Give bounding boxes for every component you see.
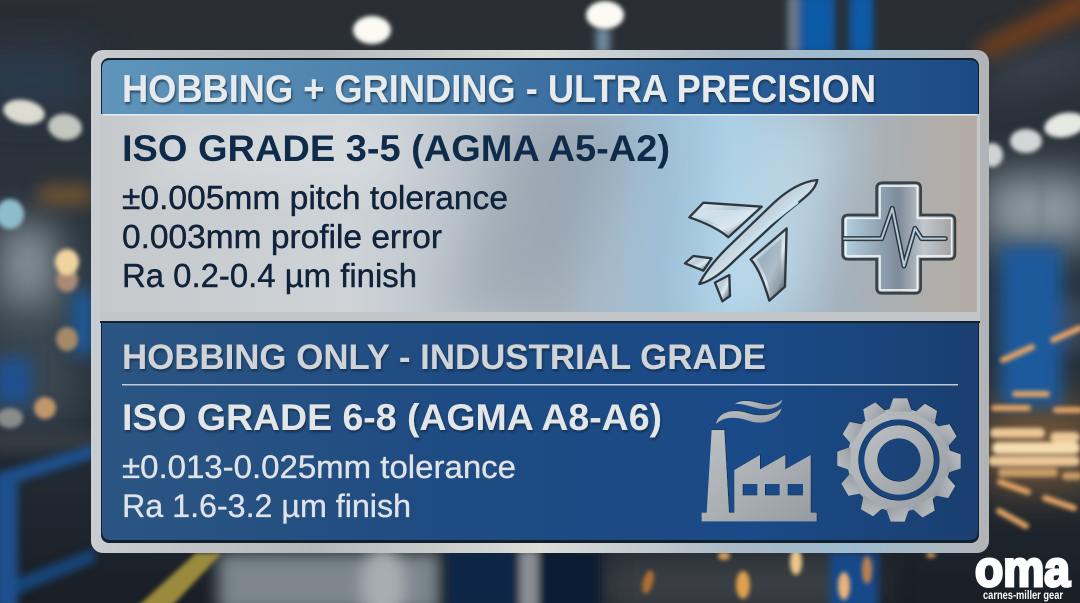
- metal sign frame: [91, 50, 989, 553]
- heading: ultra precision: HOBBING + GRINDING - ULTRA PRECISION: [122, 68, 876, 111]
- spec list: ultra precision: ±0.005mm pitch tolerance: [122, 179, 508, 216]
- spec list: industrial grade: ±0.013-0.025mm tolerance: [122, 449, 516, 485]
- spec list: industrial grade: Ra 1.6-3.2 µm finish: [122, 488, 411, 524]
- metal divider bar: [100, 312, 980, 323]
- heading underline: [122, 384, 958, 386]
- spec list: ultra precision: Ra 0.2-0.4 µm finish: [122, 257, 417, 294]
- logo: carnes-miller gear: oma: [975, 541, 1071, 597]
- heading: industrial grade: HOBBING ONLY - INDUSTRIAL GRADE: [122, 338, 766, 377]
- logo: carnes-miller gear: carnes-miller gear: [983, 590, 1063, 602]
- spec list: ultra precision: 0.003mm profile error: [122, 218, 442, 255]
- panel: ultra precision silver plate: [100, 114, 980, 312]
- panel: hobbing + grinding header band: [102, 60, 978, 114]
- icon: medical cross with pulse: [843, 183, 955, 293]
- icon: factory: [702, 399, 817, 521]
- panel: industrial grade blue plate: [102, 323, 978, 540]
- heading: ISO grade 6-8: ISO GRADE 6-8 (AGMA A8-A6): [122, 397, 662, 438]
- spec list: ultra precision: [122, 179, 508, 294]
- spec list: industrial grade: [122, 449, 516, 524]
- icon: chrome airplane: [685, 180, 817, 301]
- heading: ISO grade 3-5: ISO GRADE 3-5 (AGMA A5-A2): [122, 127, 670, 169]
- icon: gear: [837, 398, 961, 522]
